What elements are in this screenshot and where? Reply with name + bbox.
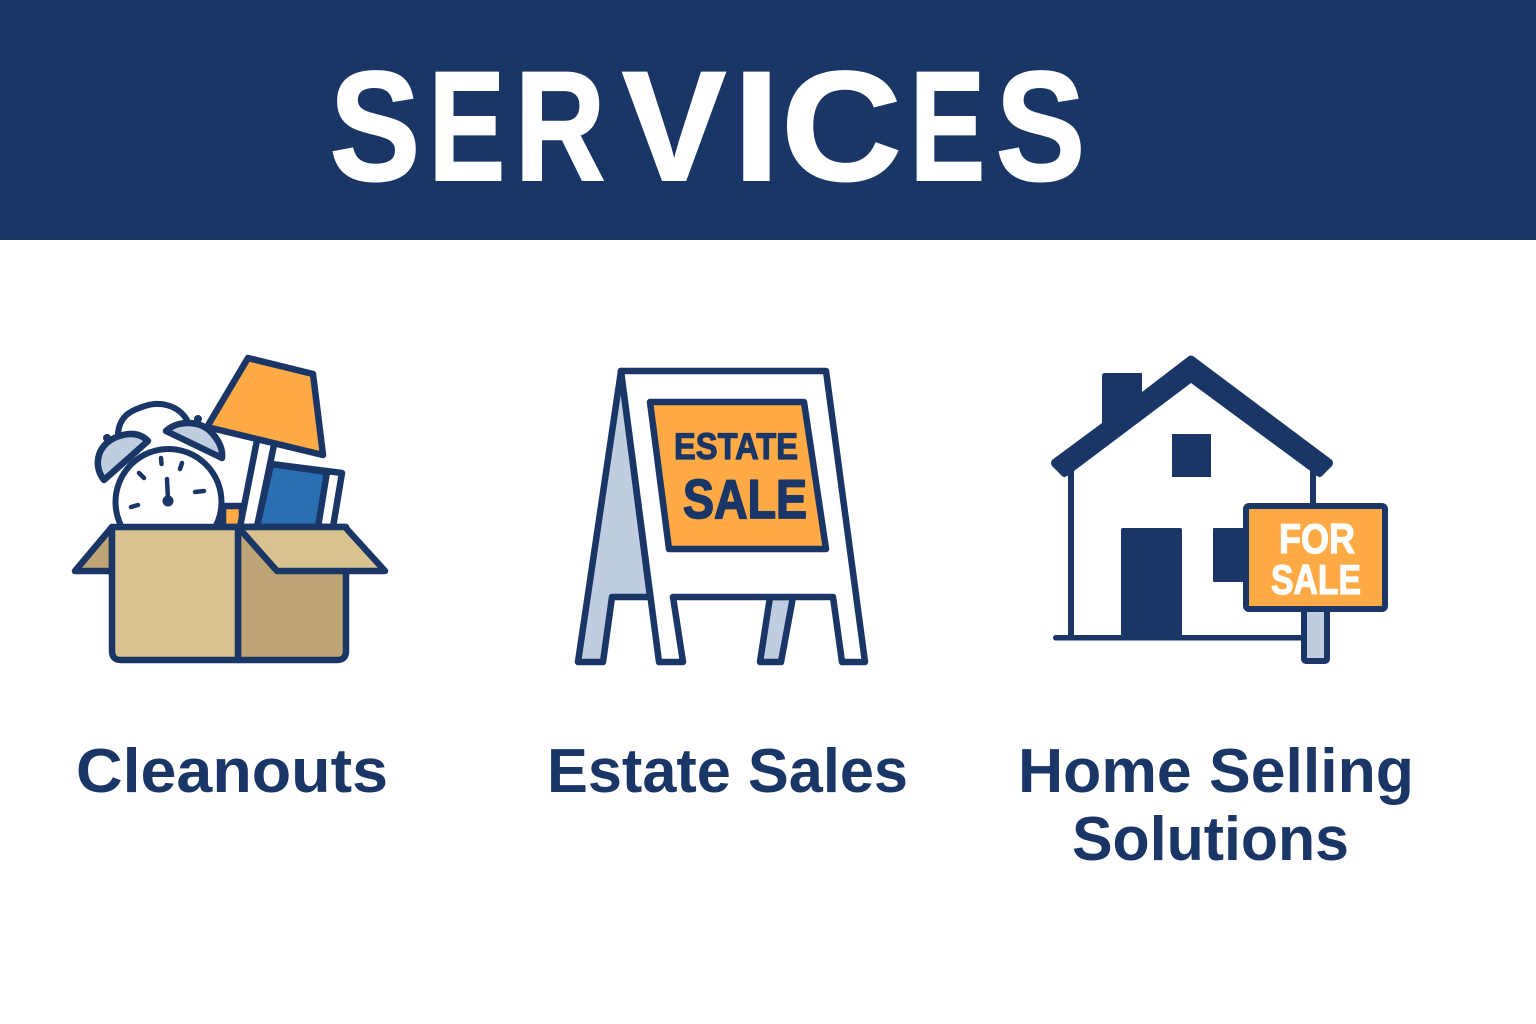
title: R bbox=[515, 40, 605, 214]
icon text: SALE: SALE bbox=[683, 468, 807, 530]
title: V bbox=[622, 40, 726, 214]
title: S bbox=[996, 40, 1085, 214]
icon part: orange sign panel bbox=[650, 402, 826, 549]
icon part: front frame bbox=[621, 371, 865, 662]
icon part: walls and ground bbox=[1053, 468, 1316, 640]
header banner bbox=[0, 0, 1536, 240]
icon part: book bbox=[257, 464, 342, 527]
label: Home Selling Solutions: Solutions bbox=[1072, 805, 1349, 874]
icon: house with for sale sign bbox=[1051, 356, 1385, 661]
icon part: roof and chimney bbox=[1051, 356, 1333, 477]
title: C bbox=[781, 40, 902, 214]
icon part: sign post bbox=[1304, 608, 1327, 661]
icon part: cardboard box bbox=[75, 527, 385, 660]
icon: estate sale A-frame sign bbox=[578, 371, 865, 662]
label: Home Selling Solutions: Home Selling bbox=[1018, 737, 1414, 806]
label: Estate Sales: Estate Sales bbox=[547, 737, 908, 806]
title: I bbox=[733, 40, 780, 214]
icon text: FOR: FOR bbox=[1279, 515, 1355, 562]
label: Home Selling Solutions bbox=[1018, 737, 1414, 874]
icon part: door bbox=[1121, 528, 1182, 638]
title: S bbox=[330, 40, 420, 214]
icon: box with household items bbox=[75, 358, 385, 660]
title: E bbox=[910, 40, 985, 214]
icon part: for sale sign bbox=[1246, 506, 1385, 609]
icon part: attic window bbox=[1172, 434, 1211, 477]
icon part: lamp bbox=[207, 358, 323, 527]
title: E bbox=[429, 40, 505, 214]
icon text: ESTATE: ESTATE bbox=[674, 425, 798, 467]
icon text: SALE: SALE bbox=[1271, 556, 1361, 603]
icon part: side window bbox=[1213, 528, 1253, 582]
icon part: alarm clock bbox=[94, 400, 226, 524]
icon part: back legs bbox=[578, 371, 793, 662]
label: Cleanouts: Cleanouts bbox=[76, 737, 388, 806]
